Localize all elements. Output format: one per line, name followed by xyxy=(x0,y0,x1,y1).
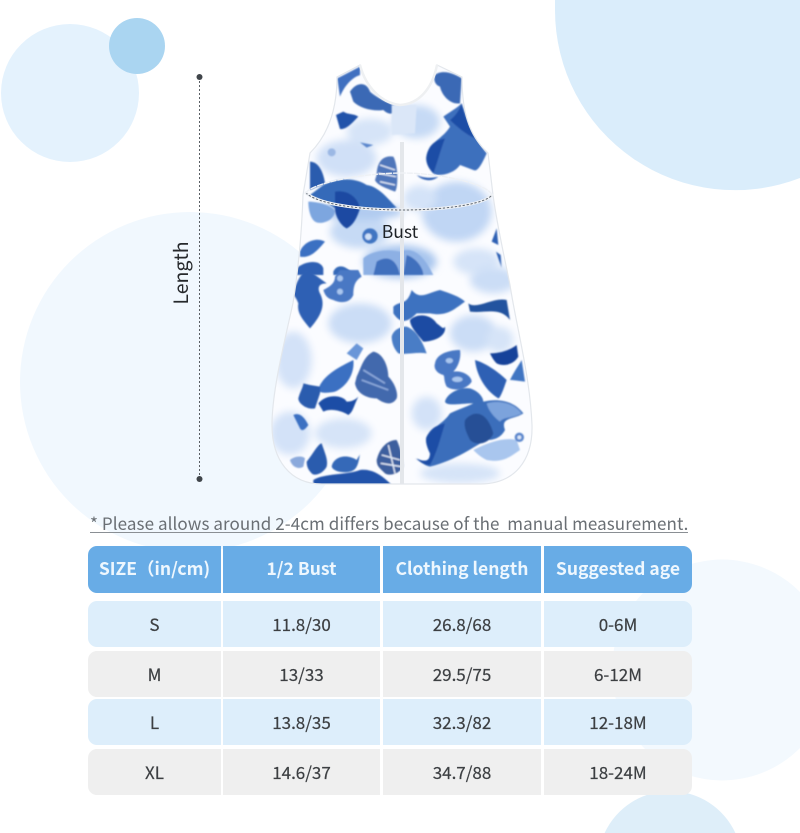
upper body print xyxy=(297,65,502,278)
label: Length: Length xyxy=(165,241,194,305)
row XL: 14.6/37 xyxy=(272,759,331,784)
row M: M xyxy=(148,661,161,686)
length measurement line xyxy=(196,74,202,482)
row L: L xyxy=(150,709,159,734)
row S: 0-6M xyxy=(599,611,637,636)
row S: 26.8/68 xyxy=(433,611,491,636)
sack outline xyxy=(272,65,532,484)
measurement note: * Please allows around 2-4cm differs because of the manual measurement. xyxy=(90,510,688,535)
row XL xyxy=(88,749,692,795)
row M: 29.5/75 xyxy=(433,661,491,686)
label: Bust: Bust xyxy=(382,219,418,244)
size table xyxy=(88,546,692,795)
row M: 13/33 xyxy=(279,661,324,686)
header row: Suggested age xyxy=(556,556,680,580)
row XL: 18-24M xyxy=(589,759,647,784)
neck back and placket xyxy=(379,98,384,101)
header row xyxy=(88,546,692,593)
pale roses upper xyxy=(317,105,500,278)
row XL: 34.7/88 xyxy=(433,759,491,784)
pale roses lower xyxy=(270,267,517,483)
row S: S xyxy=(149,611,160,636)
row S xyxy=(88,601,692,647)
row L: 12-18M xyxy=(589,709,647,734)
row M xyxy=(88,651,692,697)
row L: 32.3/82 xyxy=(433,709,491,734)
bust measuring loop xyxy=(306,173,492,210)
header row: SIZE（in/cm) xyxy=(99,556,210,580)
garment illustration: floral sleep sack xyxy=(272,64,532,484)
row XL: XL xyxy=(145,759,164,784)
lower body print xyxy=(270,267,525,485)
row S: 11.8/30 xyxy=(272,611,331,636)
row L: 13.8/35 xyxy=(272,709,331,734)
header row: 1/2 Bust xyxy=(266,556,337,580)
zipper xyxy=(400,142,404,484)
row M: 6-12M xyxy=(594,661,642,686)
header row: Clothing length xyxy=(396,556,528,580)
collar trim xyxy=(360,65,437,105)
row L xyxy=(88,699,692,745)
